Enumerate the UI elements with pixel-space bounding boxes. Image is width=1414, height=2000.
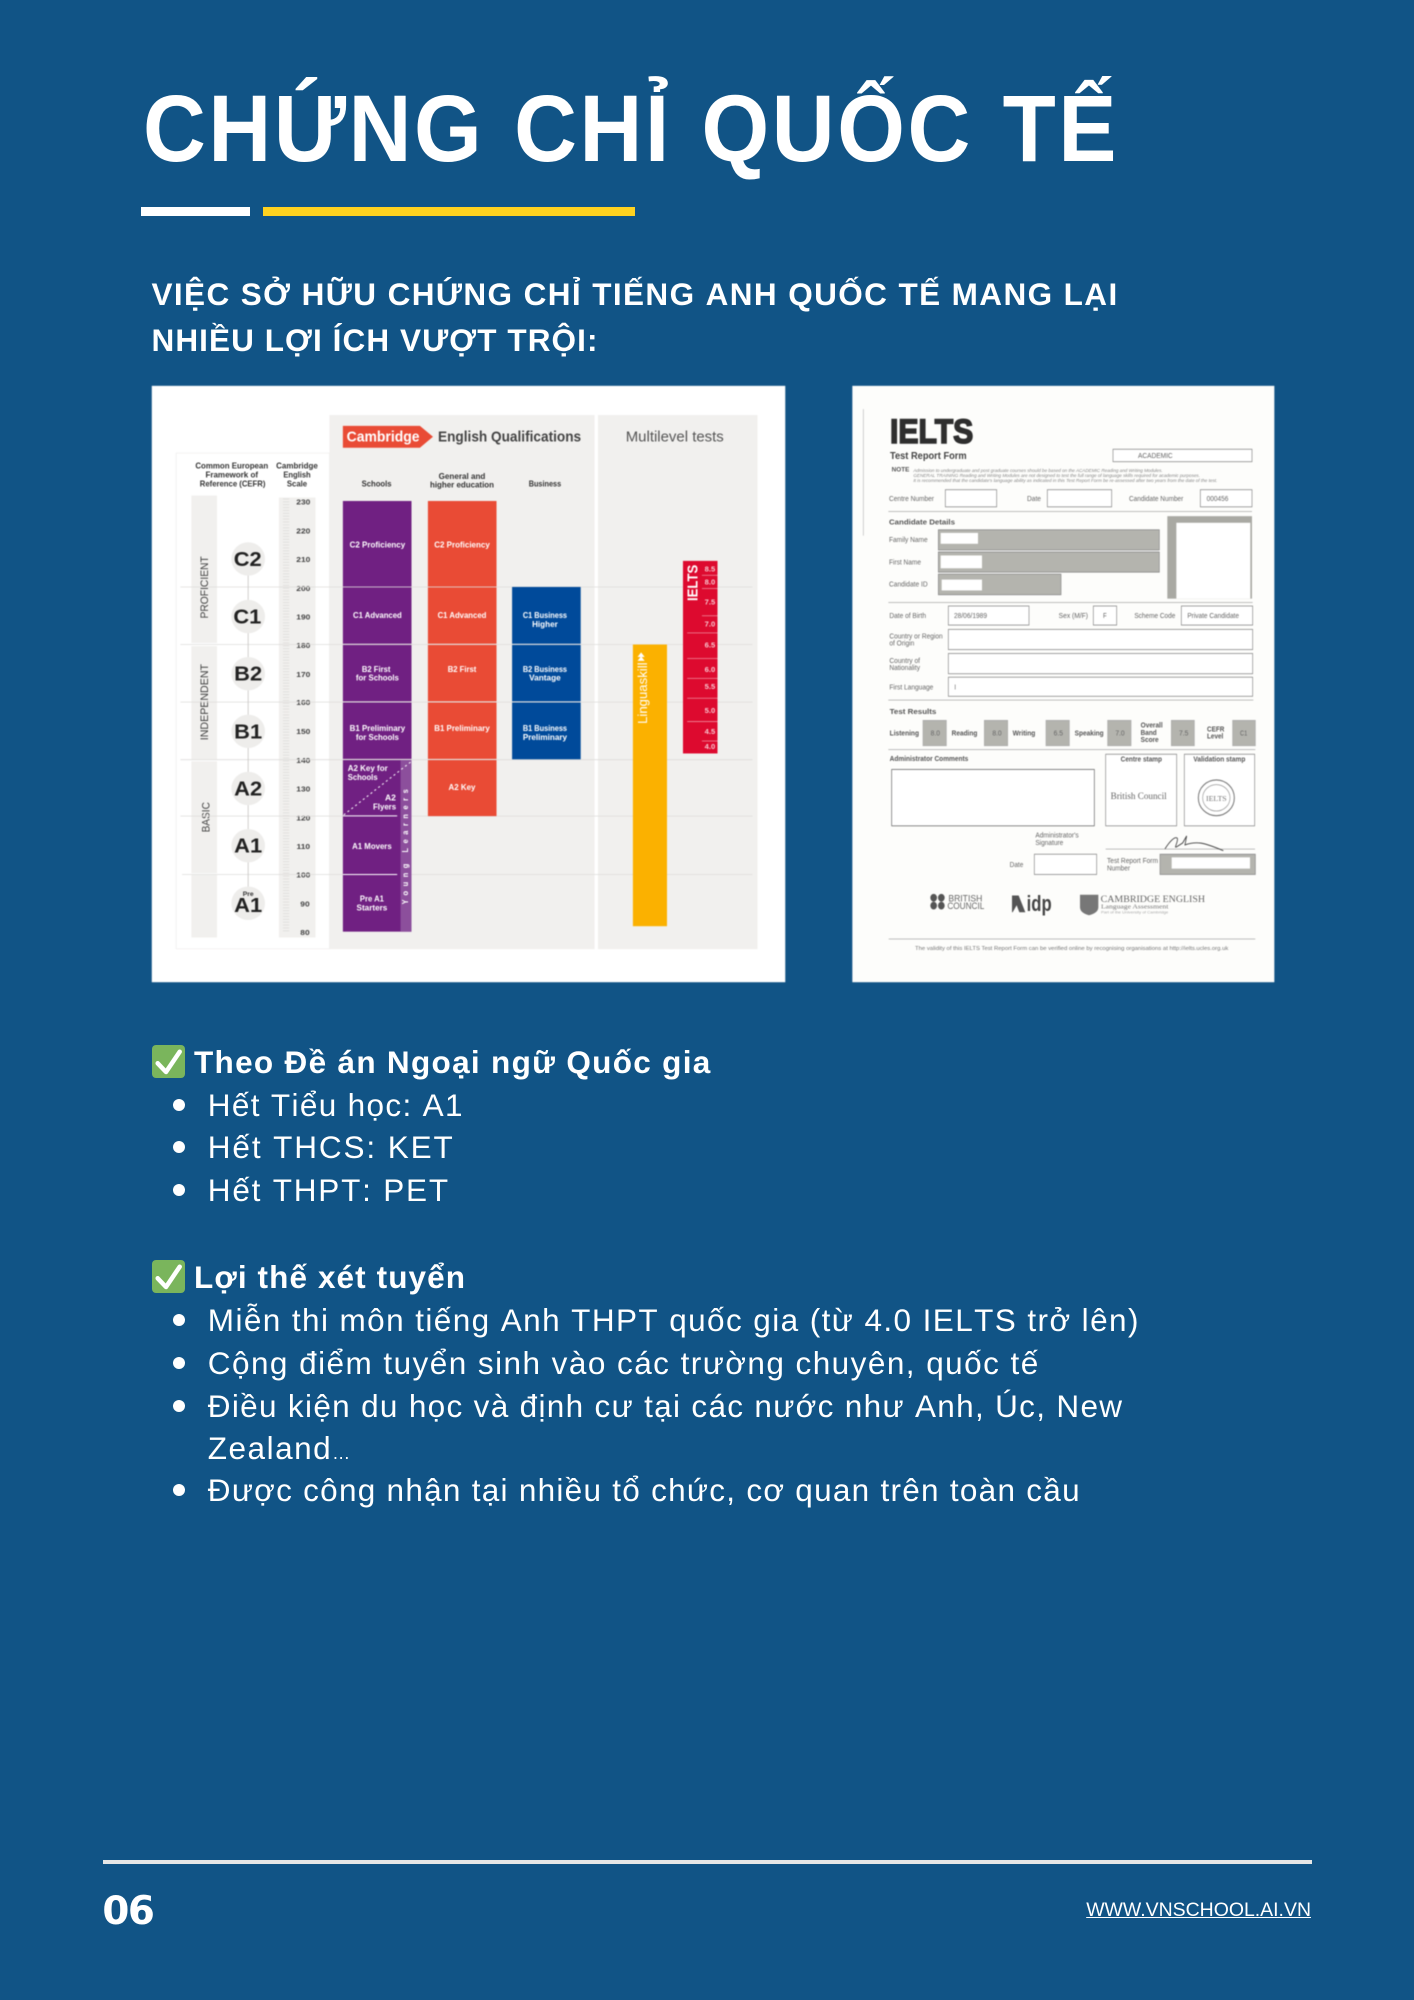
form header: Test Report Form [890, 450, 967, 461]
IELTS bar with band scores: 4.0 [705, 742, 715, 751]
form section: test results: Test Results [890, 707, 936, 716]
Cambridge English Scale: 80 [300, 928, 310, 937]
form header [890, 412, 1252, 483]
form header: ACADEMIC [1138, 452, 1173, 460]
Cambridge English Scale: 140 [296, 756, 311, 765]
Schools column: Starters [357, 903, 387, 913]
Linguaskill bar [633, 645, 667, 926]
form section: test results: 6.5 [1054, 730, 1063, 738]
form section: comments and stamps: Centre stamp [1121, 754, 1163, 764]
form section: test results: 7.0 [1115, 730, 1125, 738]
website link: WWW.VNSCHOOL.AI.VN [1086, 1899, 1311, 1921]
form section: test results: Level [1207, 731, 1223, 741]
form section: signature and date: Signature [1035, 840, 1064, 847]
subtitle [152, 276, 1119, 358]
form section: personal details: Country or Region [889, 633, 943, 640]
Schools column: for Schools [356, 732, 399, 742]
title underline: white accent [141, 207, 250, 216]
logo: British Council [930, 893, 984, 911]
form header: It is recommended that the candidate's language ability as indicated in this Test Report Form be re-assessed after two years from the date of the test. [913, 478, 1217, 483]
form section: signature and date: Number [1107, 865, 1131, 873]
bullet: exam exemption: Miễn thi môn tiếng Anh THPT quốc gia (từ 4.0 IELTS trở lên) [208, 1302, 1140, 1338]
heading: national foreign language project: Theo Đề án Ngoại ngữ Quốc gia [194, 1044, 712, 1080]
form section: test results: CEFR [1207, 724, 1225, 733]
form section: signature and date: Administrator's [1035, 832, 1079, 840]
bullet: study abroad: Zealand… [208, 1430, 350, 1466]
CEFR level circles [231, 542, 265, 920]
column headers: General and [439, 471, 485, 481]
Cambridge English Scale: 190 [296, 613, 311, 621]
Schools column: C2 Proficiency [350, 540, 405, 549]
bullet: global recognition: Được công nhận tại nhiều tổ chức, cơ quan trên toàn cầu [208, 1472, 1081, 1508]
column headers: English [283, 470, 311, 480]
Cambridge English Scale: 170 [296, 670, 311, 679]
form row: centre, date, candidate number [888, 490, 1252, 511]
Schools column: B2 First [362, 664, 390, 674]
Cambridge English Scale: 90 [300, 900, 310, 908]
logo: British Council: BRITISH [948, 893, 982, 903]
logo: British Council: COUNCIL [947, 900, 984, 911]
Schools column [343, 501, 411, 932]
form section: candidate details: Candidate Details [889, 517, 955, 527]
column headers: Schools [362, 479, 392, 489]
logo: Cambridge English [1080, 893, 1206, 915]
Schools column: Schools [348, 772, 378, 782]
form section: test results: 7.5 [1179, 730, 1189, 738]
General and higher education column [428, 501, 497, 816]
form section: test results [888, 707, 1255, 750]
Cambridge English Scale: 210 [296, 555, 311, 564]
column headers: Cambridge [276, 461, 318, 471]
CEFR level bands [191, 496, 217, 937]
form section: personal details: Sex (M/F) [1059, 613, 1088, 620]
CEFR level circles: B2 [234, 663, 262, 686]
form row: centre, date, candidate number: Centre Number [889, 496, 935, 503]
General and higher education column: B2 First [448, 664, 476, 674]
form section: test results: Listening [890, 728, 919, 738]
form section: test results: Overall [1141, 720, 1163, 730]
General and higher education column: C2 Proficiency [434, 540, 490, 549]
chart header: Cambridge English Qualifications: English Qualifications [438, 429, 581, 445]
Linguaskill bar: Linguaskill [636, 662, 650, 724]
Business column: B2 Business [523, 664, 567, 674]
form section: test results: 8.0 [992, 730, 1002, 738]
IELTS bar with band scores: 8.5 [705, 565, 715, 573]
bullet: upper secondary: Hết THPT: PET [208, 1172, 450, 1208]
CEFR level circles: C2 [234, 549, 262, 571]
chart header: Multilevel tests: Multilevel tests [626, 429, 724, 445]
page number: 06 [102, 1889, 153, 1934]
form footer note: The validity of this IELTS Test Report Form can be verified online by recognising organisations at http://ielts.ucles.org.uk [915, 946, 1229, 952]
form section: test results: Speaking [1075, 728, 1104, 738]
bullet: study abroad: Điều kiện du học và định cư tại các nước như Anh, Úc, New [208, 1388, 1123, 1424]
CEFR level circles: A2 [234, 778, 262, 800]
form section: test results: C1 [1240, 730, 1248, 738]
bullet: primary: Hết Tiểu học: A1 [208, 1087, 464, 1123]
General and higher education column: B1 Preliminary [434, 723, 490, 733]
Business column: Vantage [529, 673, 561, 683]
form section: candidate details: Candidate ID [889, 581, 928, 589]
form section: candidate details: First Name [889, 559, 921, 567]
IELTS bar with band scores: 4.5 [705, 727, 715, 736]
IELTS bar with band scores: 7.5 [705, 598, 715, 606]
IELTS bar with band scores: 5.0 [705, 706, 715, 715]
bullet: study abroad [173, 1388, 1123, 1466]
CEFR level circles: B1 [234, 721, 262, 743]
form section: comments and stamps: IELTS [1206, 794, 1227, 803]
Schools column: Flyers [373, 802, 396, 811]
Cambridge English Scale [279, 497, 316, 937]
column headers [195, 461, 561, 490]
form section: personal details: Nationality [889, 665, 921, 672]
icon: green check [152, 1260, 185, 1293]
form header: GENERAL TRAINING Reading and Writing Modules are not designed to test the full range of language skills required for academic purposes. [913, 473, 1200, 478]
logo: Cambridge English: CAMBRIDGE ENGLISH [1101, 893, 1206, 904]
logo: idp [1012, 892, 1052, 916]
Business column: Higher [532, 619, 558, 629]
Schools column: B1 Preliminary [350, 723, 405, 733]
logo: idp: idp [1027, 892, 1052, 916]
General and higher education column: A2 Key [449, 782, 476, 792]
IELTS bar with band scores: 7.0 [705, 620, 715, 628]
icon: green check [152, 1045, 185, 1078]
Business column [512, 587, 581, 759]
column headers: Framework of [205, 470, 258, 480]
column headers: Reference (CEFR) [200, 479, 266, 489]
column headers: Business [529, 479, 561, 489]
logo: Cambridge English: Part of the University of Cambridge [1101, 911, 1168, 915]
bullet: bonus points: Cộng điểm tuyển sinh vào các trường chuyên, quốc tế [208, 1345, 1040, 1381]
Schools column: A2 Key for [348, 763, 388, 773]
form section: personal details: I [954, 684, 956, 691]
form row: centre, date, candidate number: Candidate Number [1129, 496, 1184, 503]
CEFR level bands: BASIC [200, 802, 213, 832]
form header: Admission to undergraduate and post graduate courses should be based on the ACADEMIC Reading and Writing Modules. [912, 468, 1163, 473]
IELTS bar with band scores: 8.0 [705, 578, 715, 587]
IELTS bar with band scores: 5.5 [705, 682, 715, 691]
Cambridge English Scale: 100 [296, 871, 311, 879]
chart header: Cambridge English Qualifications [343, 426, 581, 448]
Schools column: C1 Advanced [353, 610, 402, 620]
Business column: Preliminary [523, 732, 567, 742]
form section: personal details: Private Candidate [1187, 613, 1239, 620]
heading: admission advantages: Lợi thế xét tuyển [194, 1259, 466, 1295]
form section: personal details: F [1103, 613, 1107, 620]
form row: centre, date, candidate number: 000456 [1207, 496, 1229, 503]
form section: personal details: Country of [889, 657, 920, 665]
subtitle: VIỆC SỞ HỮU CHỨNG CHỈ TIẾNG ANH QUỐC TẾ MANG LẠI [152, 276, 1119, 312]
form section: candidate details [888, 516, 1253, 603]
Cambridge English Scale: 180 [296, 641, 311, 650]
CEFR level circles: A1 [234, 835, 262, 857]
form section: comments and stamps: Validation stamp [1193, 754, 1246, 764]
form section: personal details: 28/06/1989 [954, 613, 987, 620]
General and higher education column: C1 Advanced [438, 610, 486, 620]
CEFR level circles: A1 [234, 895, 262, 917]
form section: personal details: of Origin [889, 640, 915, 648]
CEFR level bands: INDEPENDENT [198, 663, 211, 740]
form section: test results: 8.0 [931, 730, 940, 738]
Business column: B1 Business [523, 723, 567, 733]
form section: comments and stamps: British Council [1111, 790, 1167, 801]
subtitle: NHIỀU LỢI ÍCH VƯỢT TRỘI: [152, 322, 599, 358]
column headers: Common European [195, 461, 268, 471]
CEFR level circles: C1 [233, 606, 262, 628]
form section: signature and date: Date [1010, 862, 1024, 869]
form section: candidate details: Family Name [889, 537, 928, 544]
form section: personal details: Date of Birth [889, 613, 926, 620]
Cambridge English Scale: 200 [296, 584, 311, 593]
form header: NOTE [892, 467, 909, 474]
Cambridge English Scale: 220 [296, 527, 311, 536]
form section: test results: Reading [952, 728, 977, 738]
panel: IELTS Test Report Form [852, 385, 1276, 983]
Schools column: Pre A1 [360, 894, 384, 904]
Cambridge English Scale: 120 [296, 814, 311, 822]
form row: centre, date, candidate number: Date [1027, 496, 1041, 503]
IELTS bar with band scores: 6.5 [705, 641, 715, 649]
panel: Cambridge English Qualifications chart [151, 385, 786, 983]
form section: comments and stamps: Administrator Comments [890, 754, 968, 763]
column headers: higher education [430, 480, 494, 490]
Cambridge English Scale: 110 [297, 842, 311, 851]
form section: test results: Writing [1013, 728, 1035, 738]
column headers: Scale [287, 479, 307, 489]
Cambridge English Scale: 130 [296, 785, 311, 794]
title: CHỨNG CHỈ QUỐC TẾ [143, 76, 1119, 181]
form section: test results: Band [1141, 727, 1157, 737]
form section: personal details: First Language [889, 684, 934, 691]
form section: test results: Score [1141, 735, 1159, 744]
CEFR level bands: PROFICIENT [198, 556, 211, 618]
bullet: lower secondary: Hết THCS: KET [208, 1129, 455, 1165]
benefits list [152, 1044, 1140, 1508]
title underline: yellow accent [263, 207, 635, 216]
form section: personal details: Scheme Code [1134, 613, 1176, 620]
chart header: Cambridge English Qualifications: Cambridge [347, 429, 420, 445]
IELTS bar with band scores: 6.0 [705, 665, 715, 674]
CEFR level circles: Pre [243, 891, 254, 898]
form section: signature and date: Test Report Form [1107, 858, 1158, 865]
form header: IELTS [890, 412, 973, 451]
Schools column: for Schools [356, 673, 399, 683]
form section: signature and date [1010, 832, 1255, 874]
Cambridge English Scale: 160 [296, 699, 311, 707]
Schools column: A2 [385, 793, 396, 802]
form section: comments and stamps [890, 754, 1255, 826]
logo: Cambridge English: Language Assessment [1101, 904, 1169, 910]
IELTS bar with band scores [683, 561, 718, 753]
Business column: C1 Business [523, 610, 567, 620]
Cambridge English Scale: 150 [296, 727, 311, 736]
IELTS bar with band scores: IELTS [685, 565, 702, 601]
Schools column: A1 Movers [352, 841, 392, 851]
Schools column: Young Learners [401, 789, 410, 904]
form section: personal details [888, 606, 1253, 700]
Cambridge English Scale: 230 [296, 498, 311, 506]
